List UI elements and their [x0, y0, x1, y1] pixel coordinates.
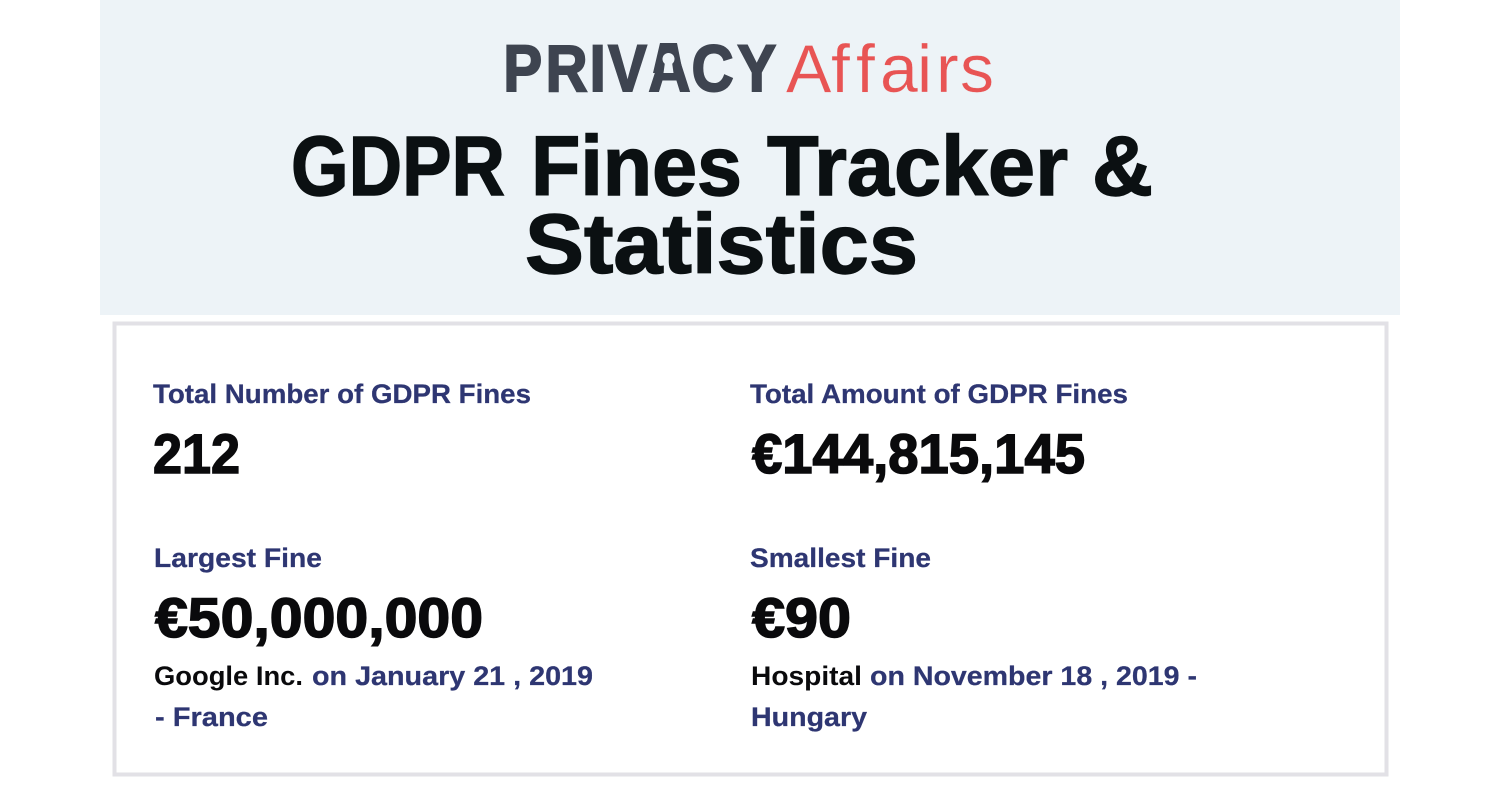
title: Statistics [525, 197, 918, 291]
title: Fines [531, 119, 742, 213]
title: Tracker [767, 119, 1068, 213]
stat: smallest fine: €90 [752, 586, 851, 649]
stat: total amount of fines: €144,815,145 [752, 422, 1085, 485]
stat: largest fine: Google Inc. [154, 661, 303, 691]
stat: smallest fine: Smallest Fine [750, 543, 931, 573]
title: GDPR [291, 119, 505, 213]
logo: PRIVACY [503, 33, 776, 106]
stat: largest fine [154, 543, 593, 732]
stat: total amount of fines: Total Amount of GDPR Fines [750, 379, 1128, 409]
stat: total amount of fines [750, 379, 1128, 485]
stat: largest fine: Largest Fine [154, 543, 322, 573]
logo [503, 31, 994, 107]
title: & [1092, 119, 1153, 213]
stat: largest fine: €50,000,000 [155, 586, 483, 649]
title [291, 119, 1153, 291]
stat: smallest fine: on November 18 , 2019 - [870, 661, 1197, 691]
stat: largest fine: - France [155, 702, 268, 732]
stat: smallest fine [750, 543, 1197, 732]
stat: total number of fines [153, 379, 531, 485]
stat: smallest fine: Hungary [751, 702, 867, 732]
logo: Affairs [786, 31, 994, 107]
header panel [100, 0, 1400, 315]
stats panel [114, 324, 1386, 774]
stat: largest fine: on January 21 , 2019 [312, 661, 593, 691]
stat: total number of fines: 212 [153, 422, 240, 485]
stat: total number of fines: Total Number of GDPR Fines [153, 379, 531, 409]
stat: smallest fine: Hospital [751, 661, 862, 691]
